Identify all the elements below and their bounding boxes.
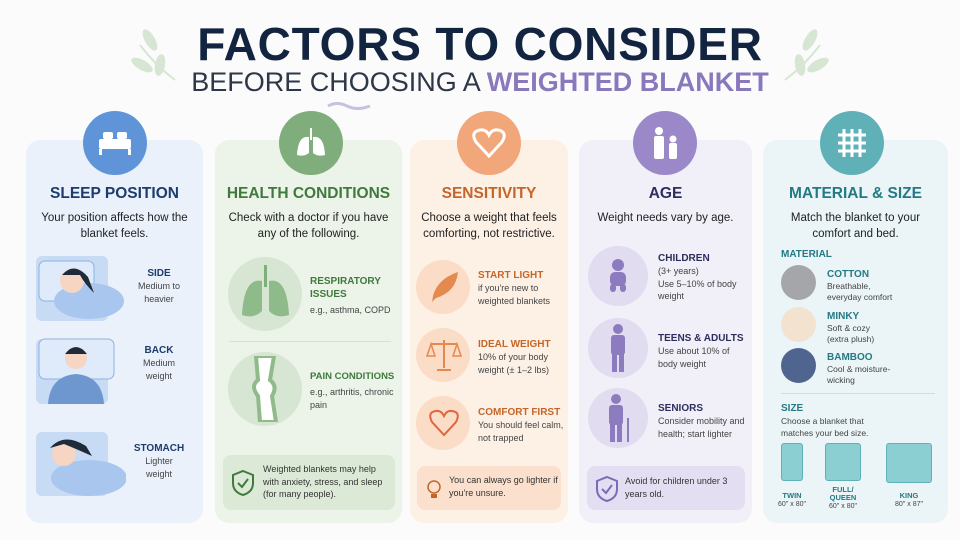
item: stomach [36,432,184,496]
item: cotton: everyday comfort [827,292,892,302]
title: FACTORS TO CONSIDER [197,18,763,70]
item: comfort first: You should feel calm, [478,420,563,430]
item: seniors: health; start lighter [658,428,732,438]
item: side: Medium to [138,281,180,291]
item: side [36,256,180,321]
bed: full/queen [825,443,861,510]
callout: health note: Weighted blankets may help with anxiety, stress, and sleep (for many people). [263,464,382,499]
panel: sleep position [26,140,203,523]
bed: full/queen: FULL/ [832,485,854,494]
item: comfort first: not trapped [478,432,524,442]
item: respiratory: e.g., asthma, COPD [310,305,391,315]
bed: full/queen: 60" x 80" [829,503,857,510]
item: respiratory: RESPIRATORY [310,276,381,287]
item: pain conditions: pain [310,400,327,410]
callout: age warning: Avoid for children under 3 years old. [625,476,727,498]
item: bamboo: Cool & moisture- [827,364,890,374]
item: start light [416,260,550,314]
item: bamboo [781,348,890,385]
heading: age: AGE [649,185,682,202]
item: children: (3+ years) [658,266,699,276]
text: sleep subtitle: Your position affects how the blanket feels. [41,212,188,240]
callout: sensitivity tip [417,466,561,510]
item: start light: weighted blankets [478,296,550,306]
text: sensitivity subtitle: Choose a weight that feels comforting, not restrictive. [421,212,557,240]
item: bamboo: BAMBOO [827,352,873,363]
icon: heart [457,111,521,175]
item: minky: Soft & cozy [827,323,870,333]
label: material: MATERIAL [781,249,832,260]
bed: twin [778,443,806,508]
text: material subtitle: Match the blanket to your comfort and bed. [791,212,920,240]
item: back: BACK [145,345,173,356]
label: size: SIZE [781,403,803,414]
panel: age [579,140,752,523]
item: teens & adults: Use about 10% of [658,346,730,356]
item: children: weight [658,291,684,301]
item: back: Medium [143,358,175,368]
item: stomach: Lighter [145,456,173,466]
item: ideal weight: weight (± 1–2 lbs) [478,364,549,374]
text: age subtitle: Weight needs vary by age. [598,212,733,224]
decorative leaf right [784,29,829,81]
icon: weave [820,111,884,175]
item: back: weight [146,370,172,380]
panel: material & size [763,140,948,523]
item: cotton [781,265,892,302]
item: children: CHILDREN [658,253,710,264]
item: pain conditions: e.g., arthritis, chronic [310,387,394,397]
icon: lungs [279,111,343,175]
item: stomach: weight [146,468,172,478]
item: seniors [588,388,745,448]
callout: sensitivity tip: You can always go lighter if you're unsure. [449,475,558,498]
item: respiratory [228,257,391,331]
item: seniors: Consider mobility and [658,416,745,426]
item: children: Use 5–10% of body [658,278,737,288]
item: children [588,246,737,306]
item: side: heavier [144,294,174,304]
item: stomach: STOMACH [134,443,184,454]
item: ideal weight: IDEAL WEIGHT [478,339,551,350]
text: health subtitle: Check with a doctor if you have any of the following. [229,212,388,240]
item: bamboo: wicking [827,375,855,385]
item: ideal weight [416,328,551,382]
icon: family [633,111,697,175]
bed: king: KING [900,491,918,500]
icon: bed [83,111,147,175]
item: cotton: COTTON [827,269,869,280]
item: side: SIDE [147,268,171,279]
bed: king [886,443,932,508]
heading: sensitivity: SENSITIVITY [442,185,536,202]
callout: age warning [587,466,745,510]
item: minky: (extra plush) [827,334,874,344]
item: comfort first [416,396,563,450]
bed: twin: 60" x 80" [778,501,806,508]
item: back [36,338,175,404]
panel: sensitivity [410,140,568,523]
item: teens & adults [588,318,744,378]
label: size: Choose a blanket that [781,416,864,426]
item: respiratory: ISSUES [310,289,347,300]
bed: full/queen: QUEEN [830,493,856,502]
label: size: matches your bed size. [781,428,868,438]
bed: king: 80" x 87" [895,501,923,508]
item: teens & adults: body weight [658,358,706,368]
decorative leaf left [131,29,176,81]
heading: health conditions: HEALTH CONDITIONS [227,185,390,202]
subtitle: BEFORE CHOOSING A WEIGHTED BLANKET [191,67,769,97]
item: ideal weight: 10% of your body [478,352,548,362]
heading: material & size: MATERIAL & SIZE [789,185,922,202]
item: minky: MINKY [827,311,859,322]
item: comfort first: COMFORT FIRST [478,407,560,418]
item: minky [781,307,874,344]
heading: sleep position: SLEEP POSITION [50,185,179,202]
item: start light: if you're new to [478,283,538,293]
label: size [781,403,868,438]
panel: health conditions [215,140,402,523]
squiggle [327,102,370,110]
item: teens & adults: TEENS & ADULTS [658,333,744,344]
item: pain conditions: PAIN CONDITIONS [310,371,394,382]
item: seniors: SENIORS [658,403,703,414]
item: cotton: Breathable, [827,281,870,291]
callout: health note [223,455,395,510]
item: start light: START LIGHT [478,270,543,281]
item: pain conditions [228,352,394,426]
bed sizes [778,443,932,510]
bed: twin: TWIN [782,491,802,500]
